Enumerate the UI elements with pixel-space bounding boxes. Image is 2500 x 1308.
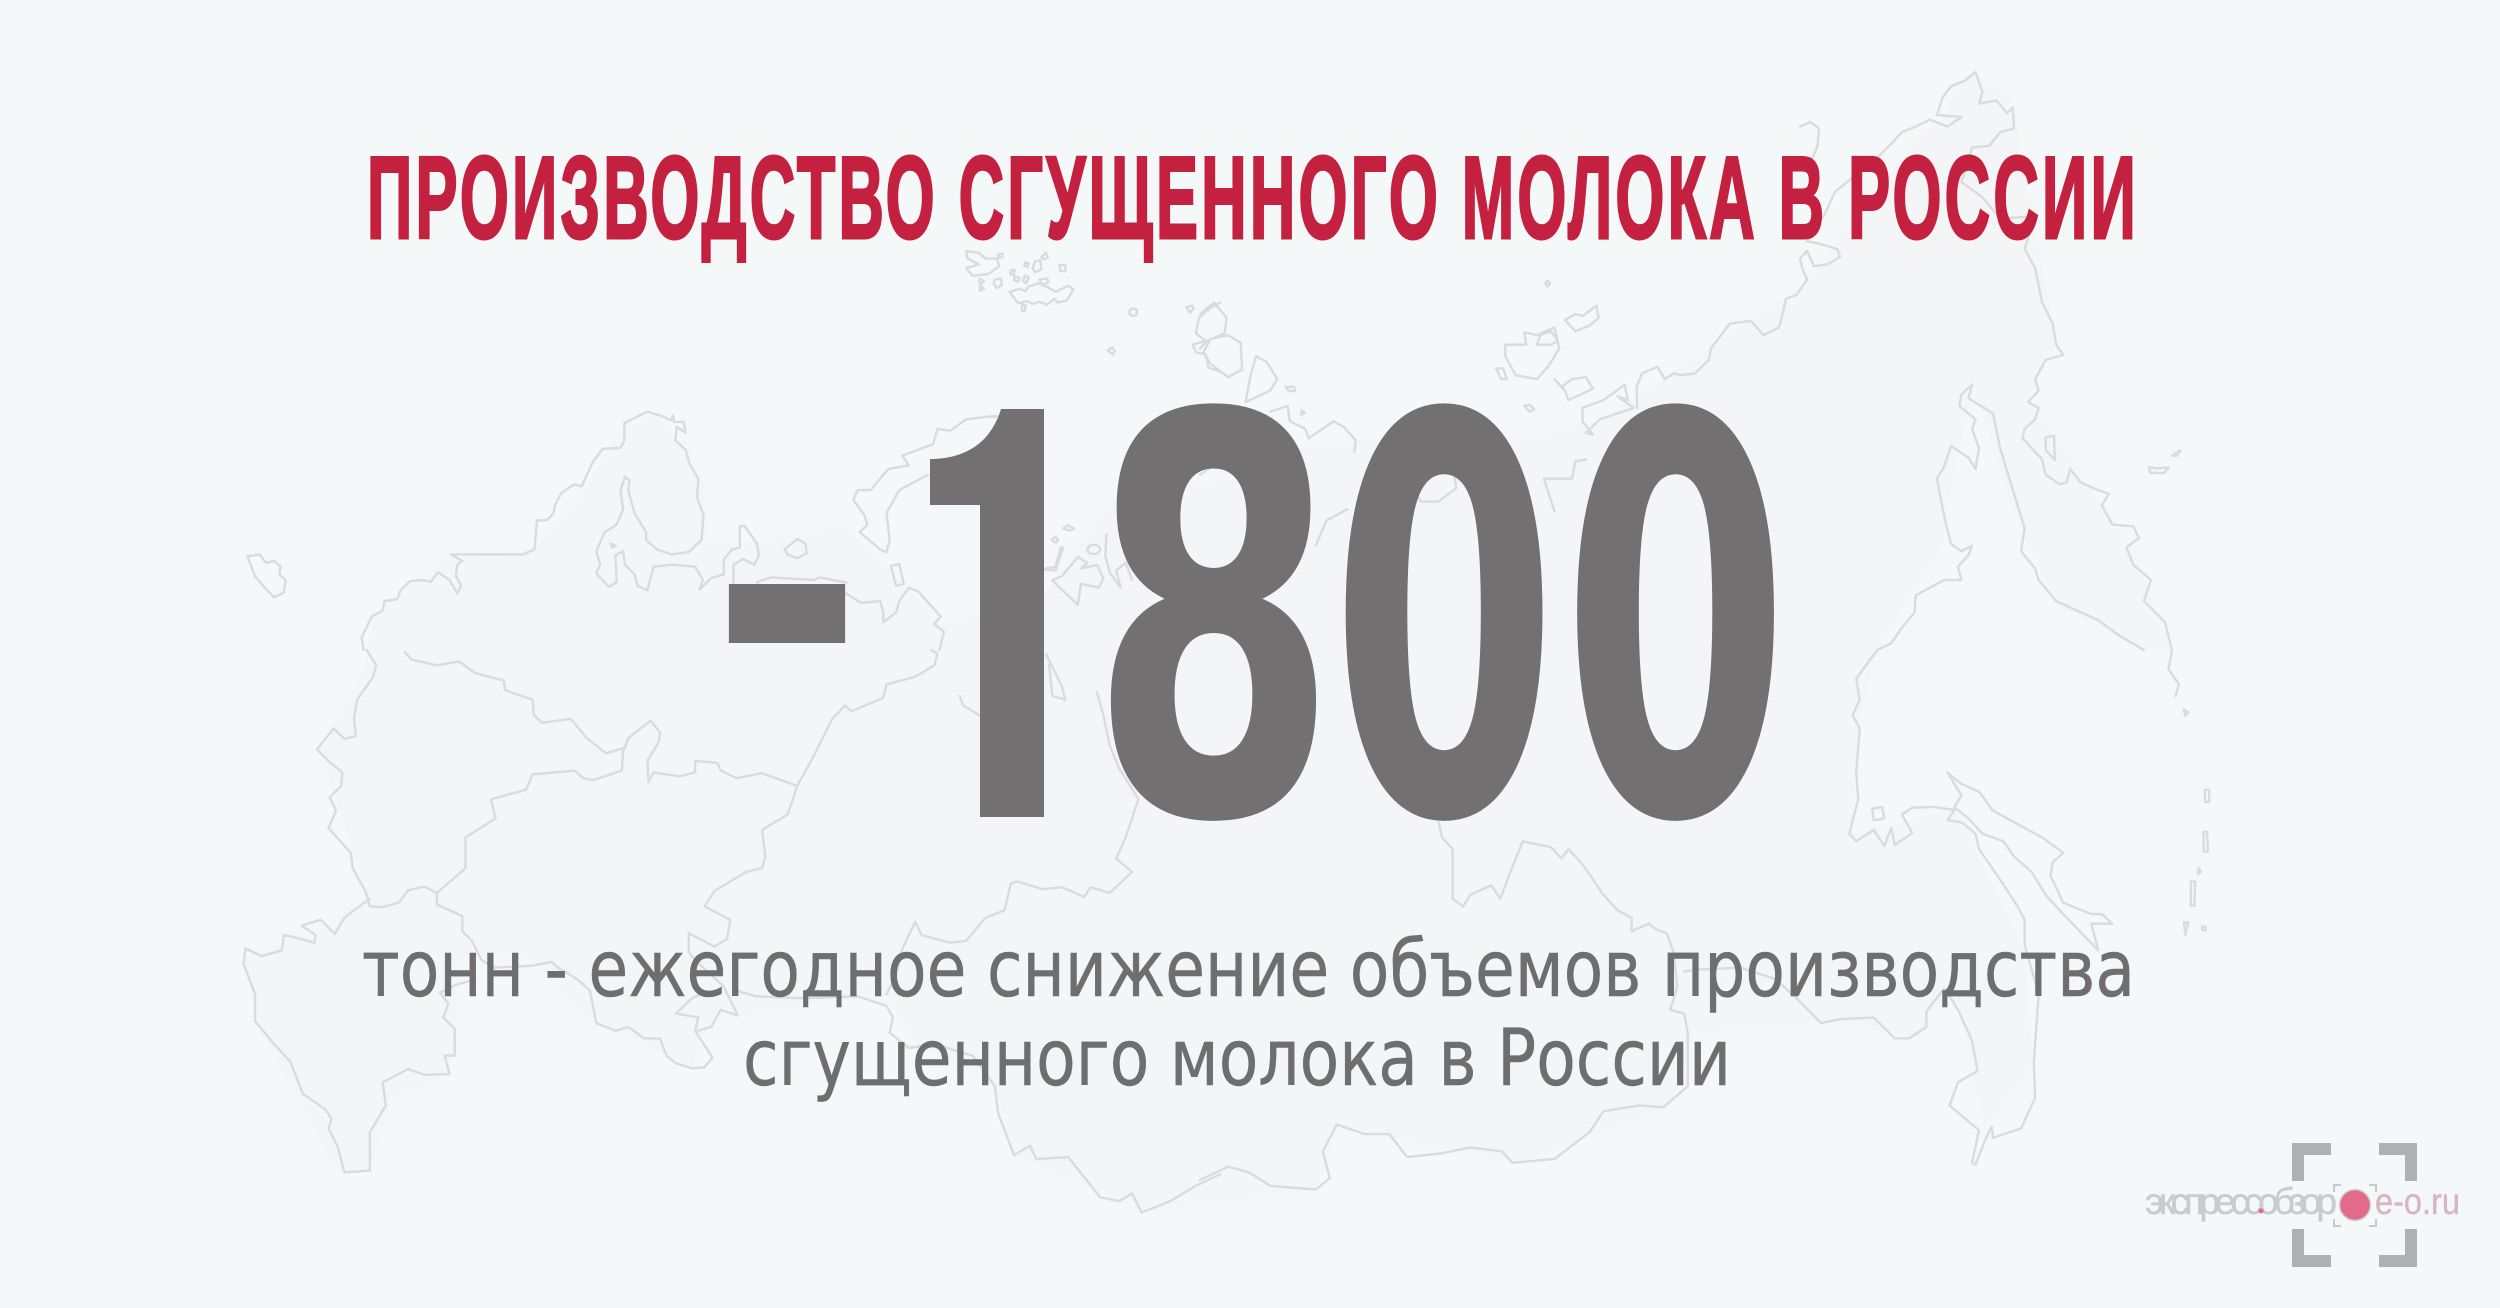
big number <box>728 403 1774 821</box>
map of Russia <box>244 72 2209 1213</box>
logo: экспрессобзор <box>2145 1181 2336 1222</box>
logo: e-o.ru <box>2375 1181 2460 1222</box>
big number: 1 <box>829 296 1146 933</box>
big number: - <box>711 294 863 848</box>
big number: 0 <box>1561 302 1790 944</box>
subtitle: сгущенного молока в России <box>743 1014 1731 1104</box>
big number: 0 <box>1330 302 1558 944</box>
subtitle <box>362 925 2135 1104</box>
logo <box>2145 1143 2460 1267</box>
big number: 8 <box>1089 301 1338 943</box>
subtitle: тонн - ежегодное снижение объемов производства <box>362 925 2135 1015</box>
